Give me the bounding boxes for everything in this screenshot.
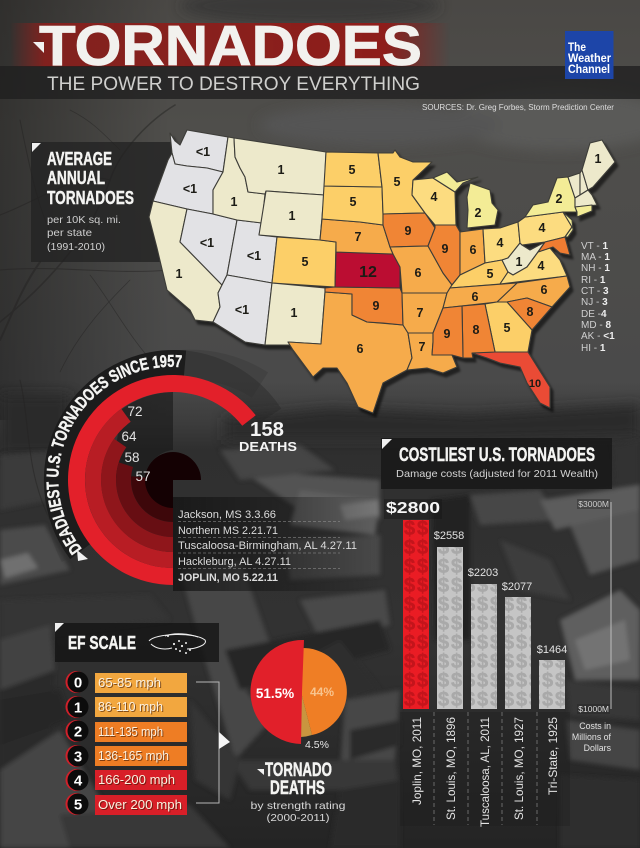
state: Iowa: 9 <box>405 224 412 238</box>
state: New Mexico <box>265 283 325 345</box>
state: North Carolina <box>497 276 570 307</box>
state: Indiana <box>460 229 485 275</box>
bar: Tri-State <box>537 644 567 709</box>
state: Mississippi <box>432 306 463 358</box>
values: death counts: 64 <box>121 429 137 444</box>
state: North Dakota: 5 <box>349 163 356 177</box>
row: EF1: 86-110 mph <box>98 700 163 714</box>
state: Iowa <box>383 213 435 247</box>
state: North Carolina: 6 <box>541 283 548 297</box>
state: Oklahoma: 9 <box>373 299 380 313</box>
state: Utah: <1 <box>247 249 261 263</box>
state: Maine <box>582 140 615 190</box>
list: small state values <box>581 241 615 354</box>
bar: St. Louis 1927 <box>502 581 532 709</box>
state: Idaho <box>213 137 265 223</box>
panel: average annual tornadoes <box>31 142 172 262</box>
list: small state values: MD - 8 <box>581 320 611 331</box>
list: small state values: DE -4 <box>581 309 607 320</box>
list: tornado names and dates: JOPLIN, MO 5.22.11 <box>178 572 278 584</box>
sources line: SOURCES: Dr. Greg Forbes, Storm Prediction Center <box>422 102 614 112</box>
bar: Tuscaloosa arc 64 deaths <box>101 439 173 552</box>
axis labels: tornado names: Tuscaloosa, AL, 2011 <box>478 717 492 827</box>
heading: average annual tornadoes: ANNUAL <box>47 168 105 188</box>
state: Florida <box>472 352 550 408</box>
state: California: 1 <box>176 267 183 281</box>
list: small state values: NH - 1 <box>581 263 610 274</box>
text: by strength rating: by strength rating <box>250 800 346 812</box>
heading: EF scale: EF SCALE <box>68 632 136 653</box>
state: South Dakota <box>322 186 383 225</box>
state: South Carolina: 8 <box>527 305 534 319</box>
bar: Joplin arc 158 deaths <box>68 375 256 585</box>
values: death counts: 72 <box>127 404 143 419</box>
row: EF3: 136-165 mph <box>98 749 169 763</box>
row: EF4: 166-200 mph <box>98 773 175 787</box>
state: Indiana: 6 <box>470 243 477 257</box>
state: Illinois <box>428 225 460 285</box>
background: bare tree branches <box>0 105 175 520</box>
list: small state values: VT - 1 <box>581 241 608 252</box>
state: Maryland and Delaware <box>538 237 570 255</box>
icon: arc triangle <box>77 550 88 561</box>
text: axis unit note <box>572 721 612 753</box>
logo: The Weather Channel: The <box>568 42 586 54</box>
bar: center disc <box>145 452 201 508</box>
bar: St. Louis 1896 <box>434 530 464 709</box>
row: EF0 <box>66 671 187 693</box>
bar: St. Louis 1927: $2077 <box>502 581 532 593</box>
state: South Dakota: 5 <box>350 195 357 209</box>
state: Connecticut and Rhode Island <box>575 205 592 217</box>
row: EF0: 65-85 mph <box>98 676 161 690</box>
state: Florida: 10 <box>529 378 541 390</box>
state: Virginia <box>500 248 567 284</box>
state: West Virginia: 1 <box>516 255 523 269</box>
text: by strength rating <box>250 800 346 824</box>
state: South Carolina <box>507 298 552 330</box>
label: 51.5 percent: 51.5% <box>256 686 294 701</box>
text: units and years: (1991-2010) <box>47 241 105 253</box>
state: Kansas: 12 <box>359 264 377 281</box>
row: EF1 <box>66 696 187 718</box>
state: Arizona <box>213 275 272 345</box>
state: Texas: 6 <box>357 342 364 356</box>
state: Arizona: <1 <box>235 303 249 317</box>
text: units and years: per state <box>47 227 92 239</box>
state: Utah <box>227 220 277 283</box>
bar: Northern MS arc 58 deaths <box>116 462 173 537</box>
row: EF5: 5 <box>74 796 82 814</box>
values: death counts: 58 <box>124 450 140 465</box>
state: Michigan: 2 <box>475 206 482 220</box>
state: Pennsylvania: 4 <box>539 221 546 235</box>
state: New York <box>525 177 577 217</box>
heading: average annual tornadoes <box>47 149 134 208</box>
state: Nebraska <box>320 219 393 254</box>
values: death counts <box>121 404 151 484</box>
state: Georgia <box>485 302 532 352</box>
text: axis unit note: Millions of <box>572 732 612 742</box>
bar: Hackleburg arc 72 deaths <box>85 409 173 568</box>
state: Louisiana <box>407 333 457 373</box>
list: small state values: CT - 3 <box>581 286 609 297</box>
state: Michigan <box>433 172 498 228</box>
state: Wyoming <box>259 191 324 240</box>
state: Minnesota: 5 <box>394 175 401 189</box>
state: Maine: 1 <box>595 152 602 166</box>
state: Louisiana: 7 <box>419 340 426 354</box>
bar: Tuscaloosa: $2203 <box>468 567 498 579</box>
logo: The Weather Channel <box>565 31 614 79</box>
state: Arkansas: 7 <box>417 306 424 320</box>
row: EF1: 1 <box>74 700 82 716</box>
bar: Jackson arc 57 deaths <box>131 476 173 522</box>
state: New York: 2 <box>556 192 563 206</box>
bar: St. Louis 1896: $2558 <box>434 530 464 542</box>
axis labels: tornado names: St. Louis, MO, 1927 <box>512 717 526 820</box>
state: Georgia: 5 <box>504 321 511 335</box>
text: units and years: per 10K sq. mi. <box>47 214 121 226</box>
state: Kansas <box>335 252 400 288</box>
bar: Tuscaloosa <box>468 567 498 709</box>
logo: The Weather Channel: Weather <box>568 53 611 65</box>
row: EF4: 4 <box>74 772 83 790</box>
axis labels: tornado names: Joplin, MO, 2011 <box>410 717 424 805</box>
row: EF2 <box>66 720 187 742</box>
state: Massachusetts <box>575 190 597 207</box>
heading: average annual tornadoes: AVERAGE <box>47 149 112 169</box>
state: California <box>149 201 222 322</box>
text: units and years <box>47 214 121 253</box>
bar: Joplin: $2800 <box>386 500 440 517</box>
label: 4.5 percent: 4.5% <box>305 739 329 751</box>
row: EF2: 111-135 mph <box>98 725 163 739</box>
state: Tennessee: 6 <box>472 290 479 304</box>
list: tornado names and dates <box>173 497 378 591</box>
callout: 158 deaths <box>239 419 297 454</box>
state: Wisconsin: 4 <box>431 190 438 204</box>
list: small state values: RI - 1 <box>581 275 606 286</box>
callout: 158 deaths: 158 <box>250 419 284 441</box>
state: Missouri: 6 <box>415 266 422 280</box>
row: EF0: 0 <box>74 674 82 692</box>
panel: EF scale <box>55 623 219 662</box>
axis: cost scale: $3000M <box>578 499 609 509</box>
state: Alabama <box>462 304 495 358</box>
state: New Hampshire <box>580 170 588 195</box>
state: Kentucky <box>450 260 508 288</box>
state: North Dakota <box>324 152 382 187</box>
axis: cost scale: $1000M <box>578 704 609 714</box>
state: Pennsylvania <box>518 212 572 245</box>
state: West Virginia <box>502 242 545 275</box>
state: Oregon <box>153 153 223 214</box>
heading: tornado deaths <box>257 760 332 799</box>
panel: costliest tornadoes heading <box>381 438 612 489</box>
axis labels: tornado names <box>410 717 560 827</box>
state: Idaho: 1 <box>231 195 238 209</box>
state: Texas <box>288 292 412 413</box>
bar: Joplin <box>386 500 440 709</box>
state: Alabama: 8 <box>473 323 480 337</box>
heading: tornado deaths: DEATHS <box>270 778 325 799</box>
text: arc heading: DEADLIEST U.S. TORNADOES SINCE 1957 <box>46 354 182 556</box>
icon: panel corner triangle <box>382 439 392 449</box>
state: Ohio <box>483 222 520 263</box>
state: Missouri <box>390 246 452 293</box>
state: Tennessee <box>443 283 517 308</box>
state: Colorado <box>272 237 336 287</box>
state: Kentucky: 5 <box>487 267 494 281</box>
state: Mississippi: 9 <box>444 327 451 341</box>
chart: deadliest tornadoes since 1957 <box>44 350 360 591</box>
state: Montana: 1 <box>278 163 285 177</box>
subtitle: THE POWER TO DESTROY EVERYTHING <box>47 73 420 95</box>
state: Virginia: 4 <box>538 259 545 273</box>
state: Washington: <1 <box>196 145 210 159</box>
state: New Mexico: 1 <box>291 306 298 320</box>
icon: panel corner triangle <box>55 623 64 632</box>
chart: tornado deaths pie <box>250 640 347 751</box>
title: TORNADOES <box>39 14 422 78</box>
state: Oklahoma <box>325 287 403 325</box>
state: Wisconsin <box>412 178 456 225</box>
list: tornado names and dates: Tuscaloosa-Birmingham, AL 4.27.11 <box>178 540 357 552</box>
list: small state values: NJ - 3 <box>581 297 608 308</box>
list: tornado names and dates: Hackleburg, AL 4.27.11 <box>178 556 291 568</box>
state: Ohio: 4 <box>497 236 504 250</box>
callout: 158 deaths: DEATHS <box>239 439 297 454</box>
text: axis unit note: Dollars <box>584 743 612 753</box>
map: US states choropleth <box>149 130 615 413</box>
state: Wyoming: 1 <box>289 209 296 223</box>
text: by strength rating: (2000-2011) <box>266 812 330 824</box>
arrow: to pie chart <box>219 732 230 749</box>
state: Oregon: <1 <box>183 182 197 196</box>
axis: cost scale <box>577 499 611 714</box>
state: Nevada: <1 <box>200 236 214 250</box>
text: axis unit note: Costs in <box>579 721 611 731</box>
state: Nevada <box>180 209 237 285</box>
icon: tornado debris swirl <box>149 634 205 654</box>
logo: The Weather Channel: Channel <box>568 64 610 76</box>
label: 44 percent: 44% <box>310 685 334 699</box>
list: small state values: MA - 1 <box>581 252 610 263</box>
state: Nebraska: 7 <box>355 230 362 244</box>
row: EF5: Over 200 mph <box>98 798 182 812</box>
state: New Jersey <box>563 212 573 237</box>
state: Minnesota <box>378 150 432 214</box>
heading: tornado deaths: TORNADO <box>265 760 332 781</box>
row: EF3: 3 <box>74 748 82 766</box>
chart: costliest tornado bars <box>384 499 612 827</box>
state: Colorado: 5 <box>302 255 309 269</box>
row: EF3 <box>66 745 187 767</box>
row: EF2: 2 <box>74 724 82 740</box>
state: Washington <box>170 130 228 172</box>
icon: title corner triangle <box>33 42 44 53</box>
title banner <box>0 14 640 99</box>
icon: panel corner triangle <box>32 143 41 152</box>
bar: Tri-State: $1464 <box>537 644 567 656</box>
row: EF5 <box>66 793 187 815</box>
list: small state values: HI - 1 <box>581 343 606 354</box>
row: EF4 <box>66 769 187 791</box>
state: Vermont <box>568 173 580 198</box>
list: EF scale rows <box>66 671 188 816</box>
state: Illinois: 9 <box>442 242 449 256</box>
list: tornado names and dates: Jackson, MS 3.3.66 <box>178 509 276 521</box>
text: damage costs subtitle: Damage costs (adjusted for 2011 Wealth) <box>396 468 598 480</box>
axis labels: tornado names: Tri-State, 1925 <box>546 717 560 795</box>
state: Montana <box>234 138 326 195</box>
heading: average annual tornadoes: TORNADOES <box>47 188 134 208</box>
axis labels: tornado names: St. Louis, MO, 1896 <box>444 717 458 820</box>
list: tornado names and dates: Northern MS 2.21.71 <box>178 525 278 537</box>
list: small state values: AK - <1 <box>581 331 615 342</box>
bracket: EF groups to pie chart <box>196 682 230 803</box>
state: Arkansas <box>402 293 447 333</box>
values: death counts: 57 <box>135 469 151 484</box>
